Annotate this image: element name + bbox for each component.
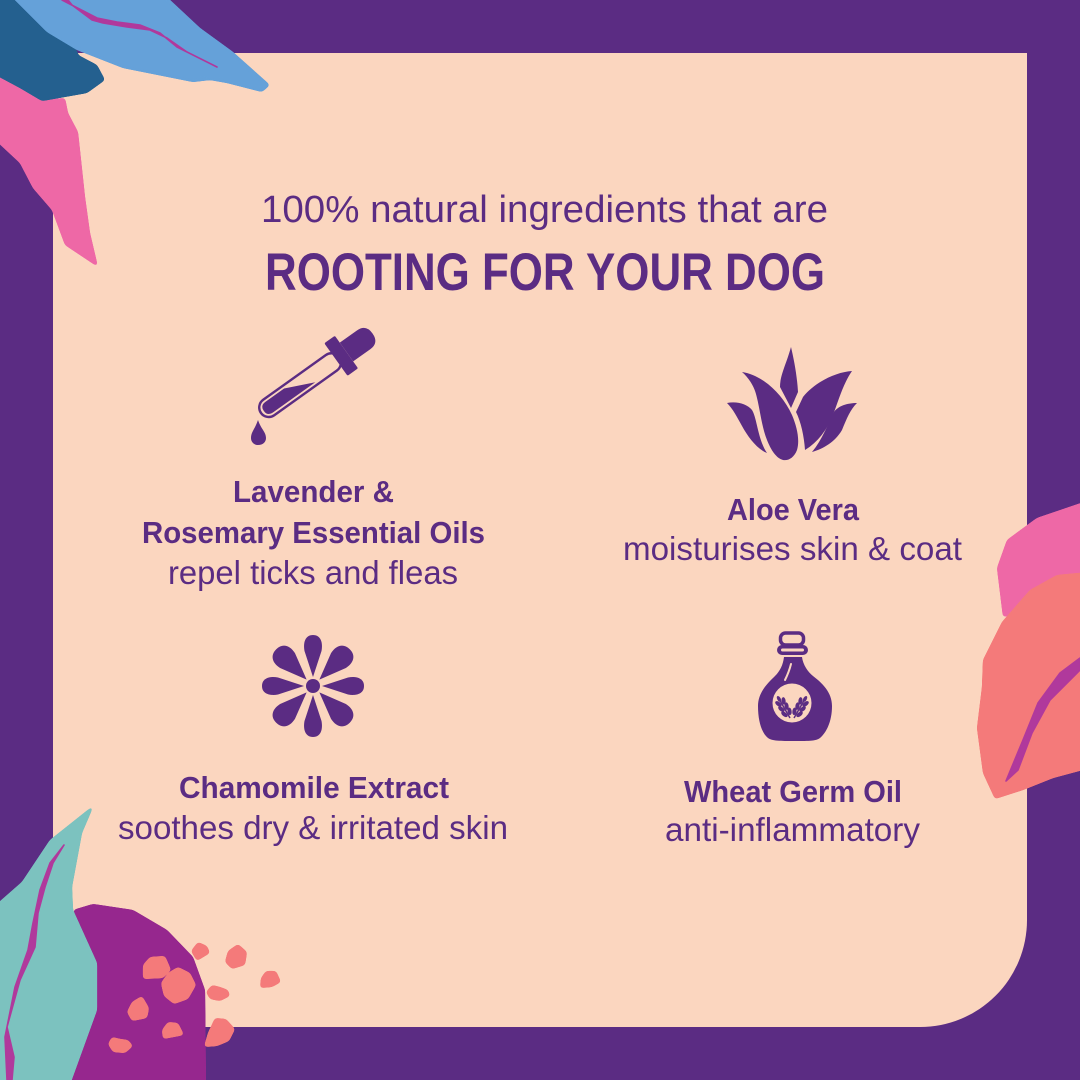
ingredient: lavender and rosemary: repel ticks and fleas <box>168 554 458 591</box>
main title: ROOTING FOR YOUR DOG <box>265 243 825 302</box>
heading line: 100% natural ingredients that are <box>261 189 828 231</box>
ingredient: aloe vera: moisturises skin & coat <box>623 530 962 567</box>
ingredient: chamomile: soothes dry & irritated skin <box>118 809 508 846</box>
ingredient: wheat germ oil: Wheat Germ Oil <box>684 774 902 809</box>
ingredient: aloe vera: Aloe Vera <box>727 492 860 527</box>
ingredient: lavender and rosemary: Lavender & <box>233 474 394 509</box>
ingredient: chamomile: Chamomile Extract <box>179 770 449 805</box>
icon: dropper <box>249 317 384 445</box>
ingredient: wheat germ oil <box>665 774 921 848</box>
icon: chamomile flower <box>262 635 364 737</box>
right leaves <box>977 500 1080 799</box>
top-left leaves <box>0 0 270 267</box>
icon: aloe vera <box>727 347 857 460</box>
bottom-left leaves and specks <box>0 805 281 1080</box>
icon: wheat germ oil bottle <box>758 633 832 741</box>
ingredient: chamomile <box>118 770 508 846</box>
ingredient: aloe vera <box>623 492 962 567</box>
ingredient: wheat germ oil: anti-inflammatory <box>665 811 921 848</box>
ingredient: lavender and rosemary: Rosemary Essential Oils <box>142 515 485 550</box>
ingredient: lavender and rosemary <box>142 474 485 591</box>
